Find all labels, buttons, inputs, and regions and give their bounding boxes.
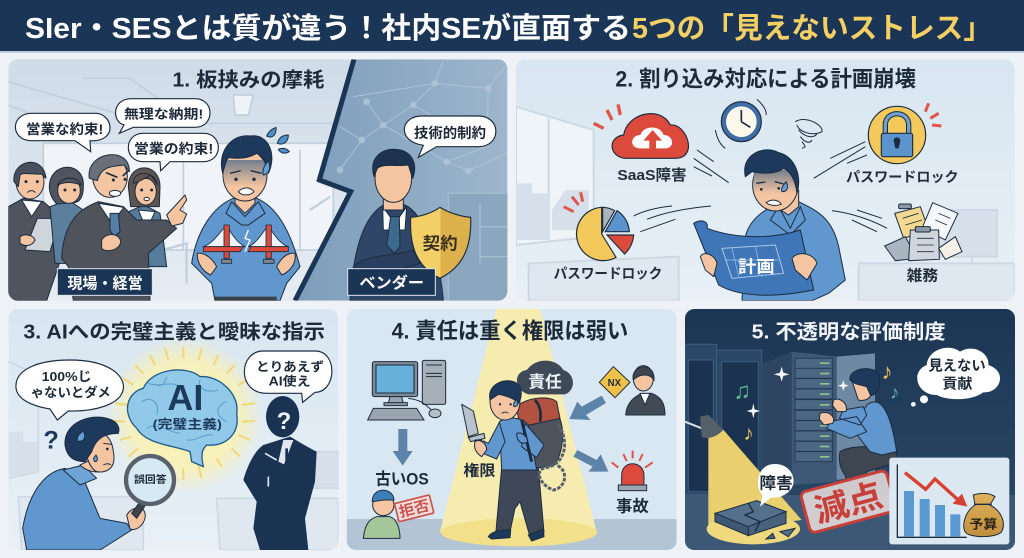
speech bubble: 障害: 障害 <box>759 473 793 492</box>
shirt <box>499 418 537 470</box>
worker in helmet <box>363 490 400 538</box>
spotlight beam <box>440 309 597 532</box>
glow and rays <box>107 337 263 493</box>
broken server <box>715 501 795 539</box>
speech bubble: とりあえずAI使え: とりあえず <box>256 359 324 374</box>
overburdened man with sword and pack <box>462 381 565 541</box>
icon: padlock <box>868 103 941 164</box>
group of people: site and management <box>8 155 187 301</box>
label: ベンダー <box>348 269 435 295</box>
label: 現場・経営: 現場・経営 <box>67 275 143 293</box>
magnifier labelled 誤回答 <box>126 456 174 504</box>
label: 雑務: 雑務 <box>907 267 938 285</box>
shoes <box>488 529 544 541</box>
speech bubble: 技術的制約 <box>404 116 496 157</box>
desk lamp and light <box>685 415 802 544</box>
network lines <box>337 60 507 174</box>
background racks <box>685 344 762 494</box>
vendor man with arms folded <box>350 149 443 301</box>
icon: old desktop computer <box>368 360 446 420</box>
sparkles and notes: ♫ <box>733 377 751 403</box>
panel: 1. sandwiched friction <box>8 59 512 303</box>
blueprint labelled 計画 <box>694 221 814 295</box>
stamp: 減点: 減点 <box>810 476 887 530</box>
panel 4 heading: 4. 責任は重く権限は弱い <box>392 318 628 343</box>
label: パスワードロック right: パスワードロック <box>846 169 959 185</box>
speech bubble: 障害 <box>758 464 794 507</box>
stamp: 減点 <box>800 470 897 533</box>
panel 5 heading: 5. 不透明な評価制度 <box>752 320 946 343</box>
icon: spiral stress scribble <box>795 119 822 148</box>
chart: falling budget <box>889 458 1009 544</box>
chain <box>539 425 565 490</box>
engineer with magnifier <box>23 417 147 550</box>
icon: red alarm light <box>612 451 653 491</box>
icon: manager with warning sign <box>599 366 665 415</box>
crack divider <box>295 59 354 301</box>
label: 事故: 事故 <box>616 497 649 516</box>
panel 1 heading: 1. 板挟みの摩耗 <box>172 69 324 92</box>
speech bubble: 技術的制約: 技術的制約 <box>414 124 486 142</box>
cloud labelled 責任: 責任 <box>528 373 562 392</box>
speech bubble: 100%じゃないとダメ: 100%じ <box>42 369 92 384</box>
main title: SIer・SESとは質が違う！社内SEが直面する <box>25 11 631 45</box>
icon: contract shield <box>411 207 471 278</box>
arrow from manager <box>569 396 606 420</box>
woman at right <box>128 168 167 267</box>
header band <box>0 0 1024 53</box>
icon: pie chart <box>564 192 634 261</box>
main title: 5つの「見えないストレス」 <box>632 12 992 45</box>
panel: 2. plan collapse from interruptions <box>516 59 1015 301</box>
sparkles and notes: ♪ <box>882 359 893 384</box>
label: パスワードロック left: パスワードロック <box>554 265 662 281</box>
thought bubble: 見えない貢献: 貢献 <box>942 375 973 392</box>
icon: money bag: 予算 <box>969 516 997 531</box>
speech bubble: 営業の約束: 営業の約束! <box>134 140 213 156</box>
label: 現場・経営 <box>57 269 152 295</box>
icon: brain labelled AI: (完璧主義) <box>153 416 222 431</box>
icon: brain labelled AI <box>127 370 237 467</box>
label: 古いOS: 古いOS <box>375 469 429 488</box>
icon: broken bridge <box>203 225 288 263</box>
sparkles and notes: ♪ <box>743 422 754 445</box>
man with clipboard <box>8 162 62 301</box>
backpack <box>522 415 563 468</box>
panel 3 heading: 3. AIへの完璧主義と曖昧な指示 <box>23 320 325 343</box>
speech bubble: とりあえずAI使え: AI使え <box>269 374 311 389</box>
panel: 3. AI perfectionism and vague instructions <box>8 309 338 550</box>
label: 権限: 権限 <box>463 462 495 480</box>
icon: manager with warning sign: NX <box>608 378 622 389</box>
server rack <box>762 352 875 485</box>
icon: red cloud SaaS failure <box>594 104 688 158</box>
sparkles and notes <box>733 359 899 445</box>
panel: 5. opaque evaluation system <box>685 309 1015 550</box>
overwhelmed man with plan <box>694 150 845 301</box>
vendor side background <box>295 59 507 301</box>
speech bubble: 無理な納期: 無理な納期! <box>124 106 203 122</box>
blueprint labelled 計画: 計画 <box>738 257 775 277</box>
thought bubble: 見えない貢献 <box>911 348 1000 407</box>
thought bubble: 見えない貢献: 見えない <box>928 358 986 375</box>
speech bubble: 営業の約束 <box>128 133 218 171</box>
speech bubble: 営業な約束: 営業な約束! <box>26 121 103 137</box>
motion lines <box>634 142 887 232</box>
speech bubble: 営業な約束 <box>15 113 110 152</box>
office background <box>516 107 1015 301</box>
sparkles and notes: ♪ <box>890 381 899 402</box>
woman behind <box>49 167 83 263</box>
sword <box>462 404 485 452</box>
stamp: 拒否 <box>394 495 434 522</box>
label: ベンダー: ベンダー <box>359 274 424 292</box>
office background <box>8 362 338 550</box>
stamp: 拒否: 拒否 <box>397 497 432 521</box>
silhouette boss <box>243 396 317 550</box>
question mark: ? <box>43 426 59 454</box>
icon: clock <box>715 99 766 148</box>
bookshelf <box>448 193 512 303</box>
speech bubble: とりあえずAI使え <box>244 351 332 402</box>
speech bubble: 100%じゃないとダメ: ゃないとダメ <box>31 385 111 400</box>
magnifier labelled 誤回答: 誤回答 <box>134 473 167 486</box>
speech bubble: 無理な納期 <box>116 99 210 133</box>
stressed man holding broken bridge <box>192 127 300 303</box>
panel: 4. heavy responsibility weak authority <box>347 309 677 550</box>
cloud labelled 責任 <box>517 361 573 394</box>
icon: pile of paperwork <box>885 203 962 261</box>
arrow down to old OS <box>393 429 413 466</box>
engineer working at server <box>819 369 897 482</box>
trousers <box>496 468 544 534</box>
arrow to accident <box>573 450 608 472</box>
silhouette boss: ? <box>277 408 291 435</box>
panel 2 heading: 2. 割り込み対応による計画崩壊 <box>615 67 916 92</box>
icon: brain labelled AI: AI <box>167 377 203 418</box>
label: SaaS障害: SaaS障害 <box>617 167 687 184</box>
speech bubble: 100%じゃないとダメ <box>16 360 123 420</box>
angry manager <box>62 155 187 301</box>
icon: contract shield: 契約 <box>423 233 458 253</box>
trend arrow <box>905 473 960 502</box>
office background <box>8 78 333 283</box>
